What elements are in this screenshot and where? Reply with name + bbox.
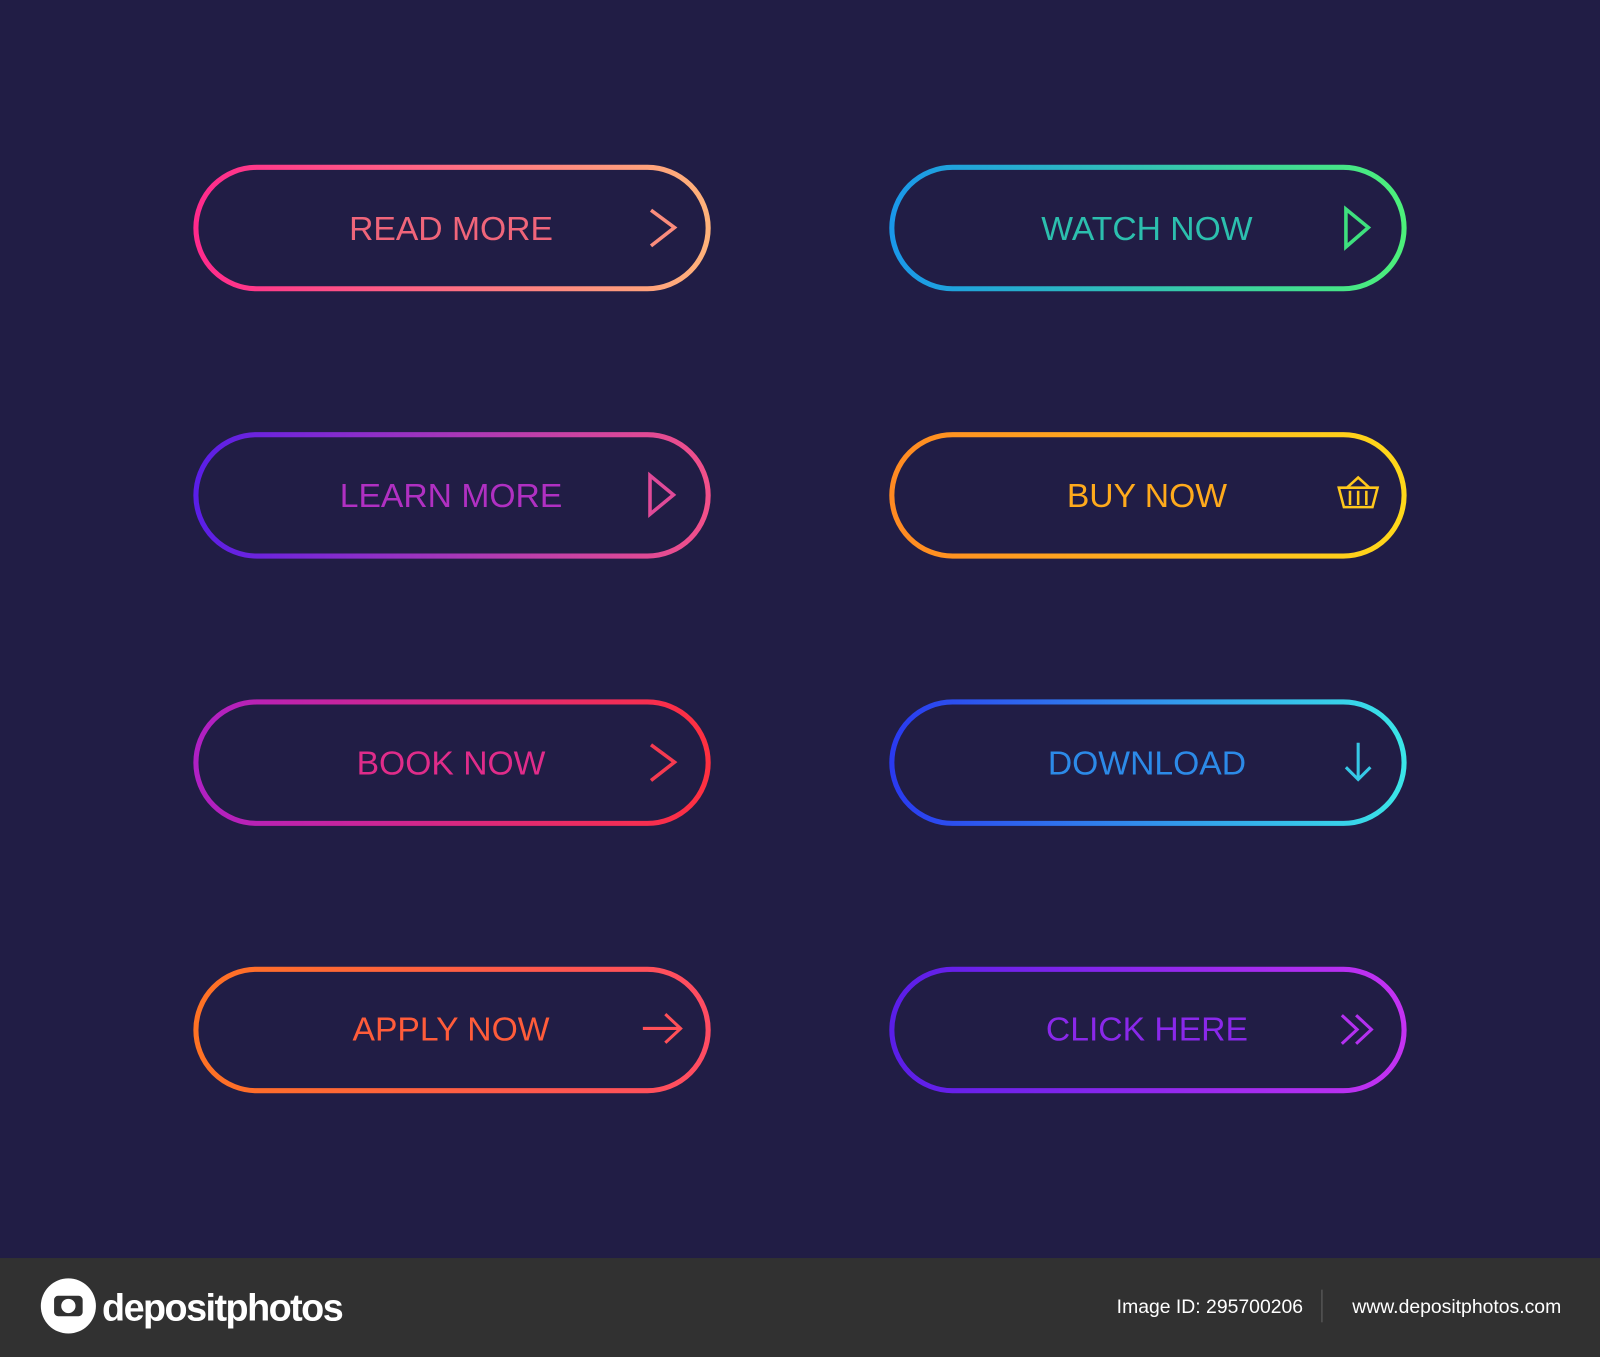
button: buy now [892, 435, 1404, 556]
button: watch now: WATCH NOW [1041, 211, 1253, 248]
button: download: DOWNLOAD [1048, 745, 1246, 782]
button: apply now [196, 969, 708, 1091]
button: book now: BOOK NOW [357, 745, 546, 782]
button: apply now: APPLY NOW [353, 1012, 550, 1049]
button: download [892, 702, 1404, 823]
button: watch now [892, 167, 1404, 289]
button: learn more: LEARN MORE [340, 478, 562, 515]
icon: basket [1339, 478, 1378, 507]
button: learn more [196, 435, 708, 556]
logo [41, 1278, 343, 1334]
button: book now [196, 702, 708, 823]
button: read more [196, 167, 708, 289]
footer bar [0, 1258, 1600, 1357]
button: read more: READ MORE [349, 211, 553, 248]
button: click here: CLICK HERE [1046, 1012, 1248, 1049]
image id: Image ID: 295700206 [1117, 1296, 1303, 1318]
button: buy now: BUY NOW [1067, 478, 1227, 515]
button: click here [892, 969, 1404, 1091]
footer bar: www.depositphotos.com [1351, 1296, 1561, 1318]
logo: depositphotos [102, 1286, 343, 1328]
